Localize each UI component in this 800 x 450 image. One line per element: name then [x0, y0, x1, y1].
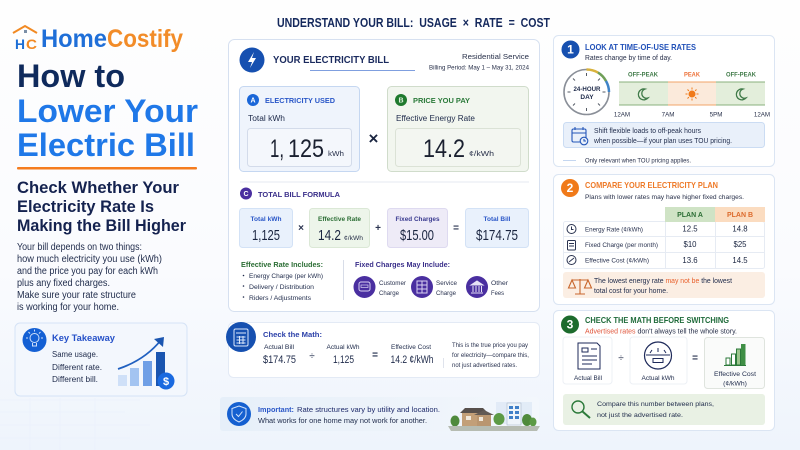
icon: light bulb — [22, 328, 46, 352]
panel: key takeaway: Different bill. — [52, 375, 98, 384]
panel: your electricity bill: = — [453, 223, 459, 234]
icon: clock — [567, 224, 576, 234]
icon: calendar clock — [572, 127, 588, 145]
panel: check the math: = — [372, 350, 378, 361]
list: effective rate includes: Energy Charge (per kWh) — [249, 273, 323, 280]
subtitle: Electricity Rate Is — [17, 198, 154, 216]
table: plan comparison: 13.6 — [682, 256, 698, 265]
chart: TOU timeline: 7AM — [662, 112, 674, 118]
formula: total bill — [466, 208, 528, 248]
callout: compare this number: not just the advertised rate. — [597, 412, 683, 419]
icon: customer charge — [354, 276, 376, 298]
panel 2: compare plans: COMPARE YOUR ELECTRICITY PLAN — [585, 180, 718, 190]
panel 3: check the math before switching: CHECK THE MATH BEFORE SWITCHING — [585, 315, 729, 325]
chart: TOU timeline: OFF-PEAK — [726, 72, 756, 78]
callout: important: Rate structures vary by utility and location. — [297, 405, 440, 414]
panel: check the math: Check the Math: — [263, 330, 322, 339]
panel: check the math: 1,125 — [333, 354, 354, 366]
chart: TOU timeline: PEAK — [684, 72, 700, 78]
box A: electricity used: 125 — [288, 135, 324, 163]
icon: rising bars with dollar — [118, 337, 174, 390]
formula: total bill: Total Bill — [484, 216, 511, 223]
box B: price you pay: ¢/kWh — [469, 151, 494, 158]
panel: your electricity bill: + — [375, 223, 381, 234]
formula: effective rate — [310, 208, 370, 248]
formula: total kWh: 1,125 — [252, 227, 280, 244]
callout: lowest rate: total cost for your home. — [594, 288, 668, 295]
card: effective cost: (¢/kWh) — [723, 380, 747, 388]
panel: your electricity bill — [228, 40, 540, 312]
box B: price you pay: Effective Energy Rate — [396, 114, 475, 123]
chart: TOU timeline: 5PM — [710, 112, 722, 118]
panel: your electricity bill: YOUR ELECTRICITY BILL — [273, 55, 389, 66]
callout: lowest rate — [563, 272, 765, 298]
panel: your electricity bill: × — [298, 223, 304, 234]
title: How to — [17, 58, 125, 94]
list: effective rate includes — [241, 260, 323, 302]
table: plan comparison: 14.5 — [732, 256, 748, 265]
icon: magnifier — [572, 401, 590, 418]
list: fixed charges may include: Fees — [491, 290, 505, 297]
heading: total bill formula — [240, 188, 341, 200]
box A: electricity used: Total kWh — [248, 114, 285, 123]
table: plan comparison — [564, 207, 765, 268]
title — [17, 58, 198, 163]
heading: total bill formula: C — [243, 191, 249, 198]
callout: important: What works for one home may not work for another. — [258, 416, 427, 425]
icon: 24-hour clock: 24-HOUR — [574, 86, 601, 93]
intro text: Make sure your rate structure — [17, 290, 136, 301]
panel: check the math — [226, 322, 540, 378]
list: fixed charges may include: Other — [491, 280, 509, 287]
panel: your electricity bill: Billing Period: May 1 – May 31, 2024 — [429, 64, 530, 72]
list: effective rate includes: Delivery / Distribution — [249, 284, 314, 291]
table: plan comparison: 14.8 — [732, 224, 748, 234]
list: effective rate includes: Effective Rate Includes: — [241, 260, 323, 269]
panel: check the math: Actual kWh — [326, 344, 360, 351]
icon: rising bars with dollar: $ — [163, 376, 169, 388]
card: effective cost: Effective Cost — [714, 371, 756, 378]
panel: check the math: Effective Cost — [391, 344, 431, 351]
heading: total bill formula: TOTAL BILL FORMULA — [258, 190, 341, 199]
panel 1: time-of-use rates — [554, 36, 774, 166]
table: plan comparison: Fixed Charge (per month) — [585, 242, 658, 249]
subtitle — [17, 179, 187, 235]
title: Electric Bill — [17, 127, 195, 163]
panel: check the math: This is the true price you pay — [452, 343, 528, 349]
list: fixed charges may include: Customer — [379, 280, 407, 287]
callout: important — [220, 397, 540, 431]
formula: effective rate: ¢/kWh — [344, 235, 363, 242]
callout: shift flexible loads: when possible—if your plan uses TOU pricing. — [593, 138, 732, 145]
intro text: how much electricity you use (kWh) — [17, 254, 162, 265]
table: plan comparison: $25 — [733, 240, 747, 249]
icon: scales — [568, 279, 592, 294]
title: Lower Your — [17, 93, 198, 129]
icon: cost circle — [567, 256, 576, 264]
table: plan comparison: PLAN B — [727, 212, 753, 219]
card: actual bill — [563, 337, 612, 384]
note: TOU only: Only relevant when TOU pricing applies. — [585, 158, 691, 164]
callout: shift flexible loads: Shift flexible loads to off-peak hours — [594, 128, 701, 135]
icon: moon — [736, 89, 746, 100]
callout: compare this number — [563, 394, 765, 425]
panel 2: compare plans — [554, 174, 774, 304]
panel: check the math: not just advertised rates. — [452, 363, 517, 369]
logo: HomeCostify: C — [26, 36, 37, 52]
formula: total kWh: Total kWh — [250, 216, 282, 223]
card: actual kWh — [630, 337, 687, 384]
panel 1: time-of-use rates: LOOK AT TIME-OF-USE RATES — [585, 42, 696, 52]
icon: 24-hour clock: DAY — [580, 94, 594, 101]
icon: other fees — [466, 276, 488, 298]
panel 3: check the math before switching: ÷ — [618, 353, 624, 364]
formula: fixed charges: $15.00 — [400, 227, 434, 244]
formula: total bill: $174.75 — [476, 227, 518, 244]
icon: moon — [638, 89, 648, 100]
logo: HomeCostify: H — [15, 36, 25, 52]
icon: sun — [686, 88, 698, 100]
icon: document — [568, 240, 576, 250]
box A: electricity used: A — [250, 98, 256, 104]
list: fixed charges may include — [354, 260, 509, 298]
callout: compare this number: Compare this number between plans, — [597, 401, 714, 408]
panel 3: check the math before switching: = — [692, 353, 698, 364]
icon: service charge — [411, 276, 433, 298]
icon: 24-hour clock — [564, 69, 609, 114]
chart: TOU timeline: 12AM — [754, 112, 770, 118]
card: effective cost — [704, 338, 764, 388]
formula: fixed charges — [388, 208, 448, 248]
callout: important: Important: — [258, 405, 294, 414]
panel: key takeaway: Key Takeaway — [52, 333, 116, 344]
formula: fixed charges: Fixed Charges — [396, 216, 440, 223]
table: plan comparison: 12.5 — [682, 224, 698, 234]
intro text: Your bill depends on two things: — [17, 242, 142, 253]
card: actual kWh: Actual kWh — [642, 375, 675, 382]
intro text — [17, 242, 162, 313]
subtitle: Making the Bill Higher — [17, 217, 187, 235]
chart: TOU timeline — [614, 72, 770, 118]
box B: price you pay — [388, 86, 528, 172]
panel: check the math: 14.2 ¢/kWh — [390, 354, 434, 366]
panel 3: check the math before switching — [554, 310, 774, 430]
chart: TOU timeline: OFF-PEAK — [628, 72, 658, 78]
formula: effective rate: Effective Rate — [318, 216, 361, 223]
table: plan comparison: Energy Rate (¢/kWh) — [585, 226, 643, 234]
callout: shift flexible loads — [564, 122, 764, 148]
icon: lightning bolt — [240, 48, 264, 72]
intro text: plus any fixed charges. — [17, 278, 110, 289]
panel 2: compare plans: 2 — [567, 181, 574, 195]
box A: electricity used: kWh — [328, 151, 344, 158]
panel 3: check the math before switching: 3 — [567, 318, 574, 332]
panel: check the math: Actual Bill — [264, 344, 295, 351]
list: fixed charges may include: Charge — [379, 290, 399, 297]
panel: check the math: for electricity—compare this, — [452, 353, 529, 359]
box A: electricity used: ELECTRICITY USED — [265, 96, 336, 105]
card: actual bill: Actual Bill — [574, 375, 603, 382]
table: plan comparison: Effective Cost (¢/kWh) — [585, 258, 649, 264]
panel 2: compare plans: Plans with lower rates may have higher fixed charges. — [585, 194, 744, 201]
list: effective rate includes: Riders / Adjustments — [249, 295, 312, 302]
chart: TOU timeline: 12AM — [614, 112, 630, 118]
panel: key takeaway: Same usage. — [52, 350, 98, 359]
panel: key takeaway — [15, 323, 187, 396]
intro text: and the price you pay for each kWh — [17, 266, 158, 277]
formula: effective rate: 14.2 — [318, 227, 341, 244]
box A: electricity used: 1, — [270, 135, 284, 163]
panel: your electricity bill: Residential Service — [462, 52, 529, 61]
panel: check the math: ÷ — [309, 351, 315, 362]
logo: HomeCostify: Home — [41, 25, 107, 53]
intro text: is working for your home. — [17, 302, 119, 313]
box A: electricity used — [240, 86, 360, 172]
box B: price you pay: 14.2 — [423, 135, 465, 163]
panel 1: time-of-use rates: Rates change by time of day. — [585, 55, 672, 62]
list: fixed charges may include: Fixed Charges May Include: — [355, 260, 450, 269]
callout: lowest rate: The lowest energy rate may not be the lowest — [594, 278, 732, 285]
list: fixed charges may include: Service — [436, 280, 457, 287]
logo: HomeCostify — [13, 25, 183, 53]
icon: shield — [227, 402, 251, 426]
panel 3: check the math before switching: Advertised rates don't always tell the whole story. — [585, 328, 737, 336]
multiply sign: × — [369, 129, 379, 148]
table: plan comparison: $10 — [683, 240, 697, 249]
icon: homes and building — [448, 402, 540, 431]
box B: price you pay: PRICE YOU PAY — [413, 96, 470, 105]
subtitle: Check Whether Your — [17, 179, 180, 197]
panel: check the math: $174.75 — [263, 354, 296, 366]
logo: HomeCostify: Costify — [107, 25, 183, 53]
formula: total kWh — [240, 208, 292, 248]
panel: key takeaway: Different rate. — [52, 363, 102, 372]
table: plan comparison: PLAN A — [677, 212, 703, 219]
box B: price you pay: B — [398, 98, 404, 104]
panel 1: time-of-use rates: 1 — [567, 42, 574, 56]
icon: calculator — [226, 322, 256, 352]
list: fixed charges may include: Charge — [436, 290, 456, 297]
heading: understand your bill: UNDERSTAND YOUR BILL: USAGE × RATE = COST — [277, 16, 550, 30]
